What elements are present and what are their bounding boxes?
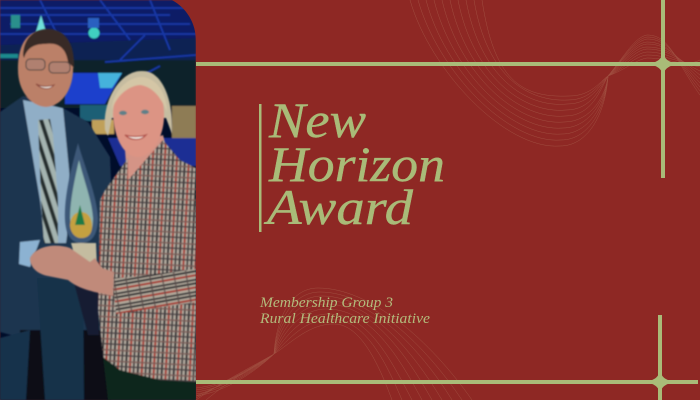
photo: woman (98, 71, 196, 400)
decorative wave: upper right (410, 0, 700, 146)
bottom sparkle (650, 373, 670, 391)
top horizontal rule (196, 62, 700, 66)
decorative wave: lower left (196, 288, 472, 400)
title accent bar (259, 104, 262, 232)
bottom vertical rule (658, 315, 662, 400)
photo: arena backdrop (0, 0, 196, 400)
subtitle: Rural Healthcare Initiative (259, 311, 431, 327)
top sparkle (653, 55, 673, 73)
title: Award (264, 179, 414, 235)
photo: two award recipients (0, 0, 196, 400)
photo: man (0, 29, 112, 400)
photo: trophy and hands (30, 143, 114, 296)
title: New (268, 92, 366, 148)
subtitle (259, 295, 431, 327)
top vertical rule (661, 0, 665, 178)
subtitle: Membership Group 3 (259, 295, 393, 311)
title: Horizon (268, 136, 445, 192)
title (264, 92, 445, 235)
bottom horizontal rule (196, 380, 698, 384)
